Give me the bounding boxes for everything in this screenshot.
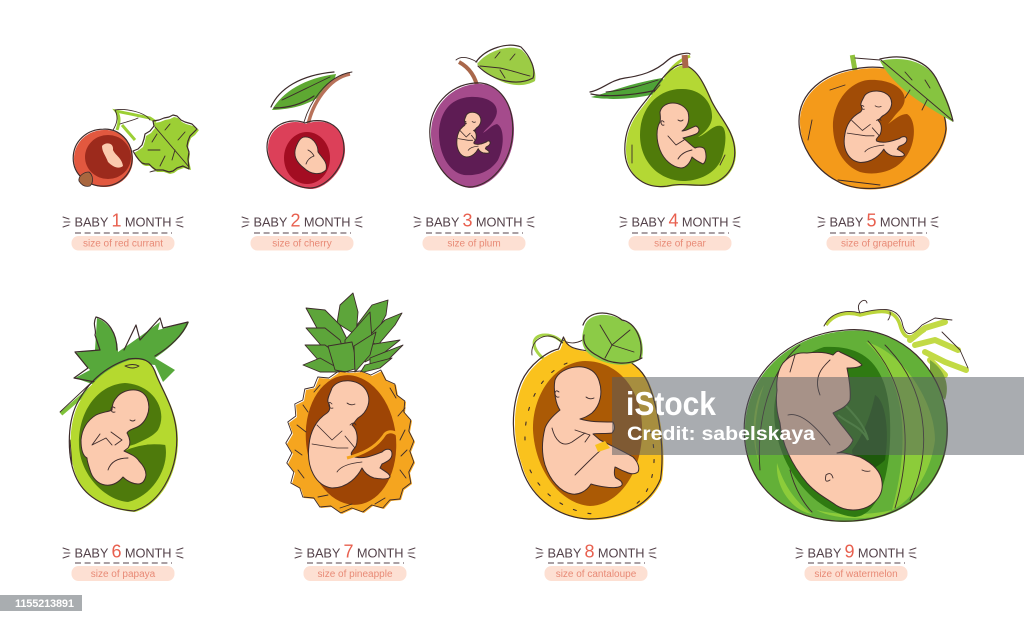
label: month 9: size of watermelon: [814, 569, 898, 580]
label: month 7: [295, 542, 415, 581]
label: month 8: [536, 542, 656, 581]
label: month 9: [796, 542, 916, 581]
label: month 8: BABY 8 MONTH: [548, 542, 644, 562]
label: month 9: BABY 9 MONTH: [808, 542, 904, 562]
label: month 5: [818, 210, 938, 250]
label: month 2: BABY 2 MONTH: [254, 210, 350, 230]
illustration: pear month 4: [590, 53, 736, 187]
label: month 6: [63, 542, 183, 581]
stock id tag: [0, 595, 82, 611]
watermark band: [612, 377, 1024, 455]
illustration: watermelon month 9: [744, 300, 968, 522]
label: month 8: size of cantaloupe: [556, 569, 637, 580]
label: month 4: [620, 210, 740, 250]
label: month 1: BABY 1 MONTH: [74, 210, 172, 230]
illustration: red currant month 1: [73, 109, 199, 187]
label: month 5: size of grapefruit: [841, 238, 915, 250]
label: month 3: size of plum: [447, 238, 501, 250]
watermark band: Credit: sabelskaya: [627, 424, 815, 445]
watermark band: iStock: [626, 385, 717, 422]
label: month 2: size of cherry: [272, 238, 332, 250]
label: month 3: [414, 210, 534, 250]
label: month 1: [63, 210, 183, 250]
illustration: pineapple month 7: [286, 293, 415, 514]
illustration: papaya month 6: [60, 317, 189, 512]
label: month 1: size of red currant: [83, 238, 163, 250]
label: month 6: size of papaya: [91, 569, 156, 580]
label: month 4: BABY 4 MONTH: [632, 210, 728, 230]
label: month 4: size of pear: [654, 238, 707, 250]
label: month 7: BABY 7 MONTH: [306, 542, 404, 562]
label: month 5: BABY 5 MONTH: [830, 210, 926, 230]
illustration: cantaloupe month 8: [513, 313, 664, 520]
stock id tag: 1155213891: [15, 598, 74, 610]
illustration: cherry month 2: [267, 72, 352, 189]
label: month 3: BABY 3 MONTH: [426, 210, 522, 230]
illustration: plum month 3: [430, 45, 535, 188]
label: month 6: BABY 6 MONTH: [74, 542, 172, 562]
illustration: grapefruit month 5: [799, 55, 953, 189]
label: month 7: size of pineapple: [317, 569, 393, 580]
label: month 2: [242, 210, 362, 250]
